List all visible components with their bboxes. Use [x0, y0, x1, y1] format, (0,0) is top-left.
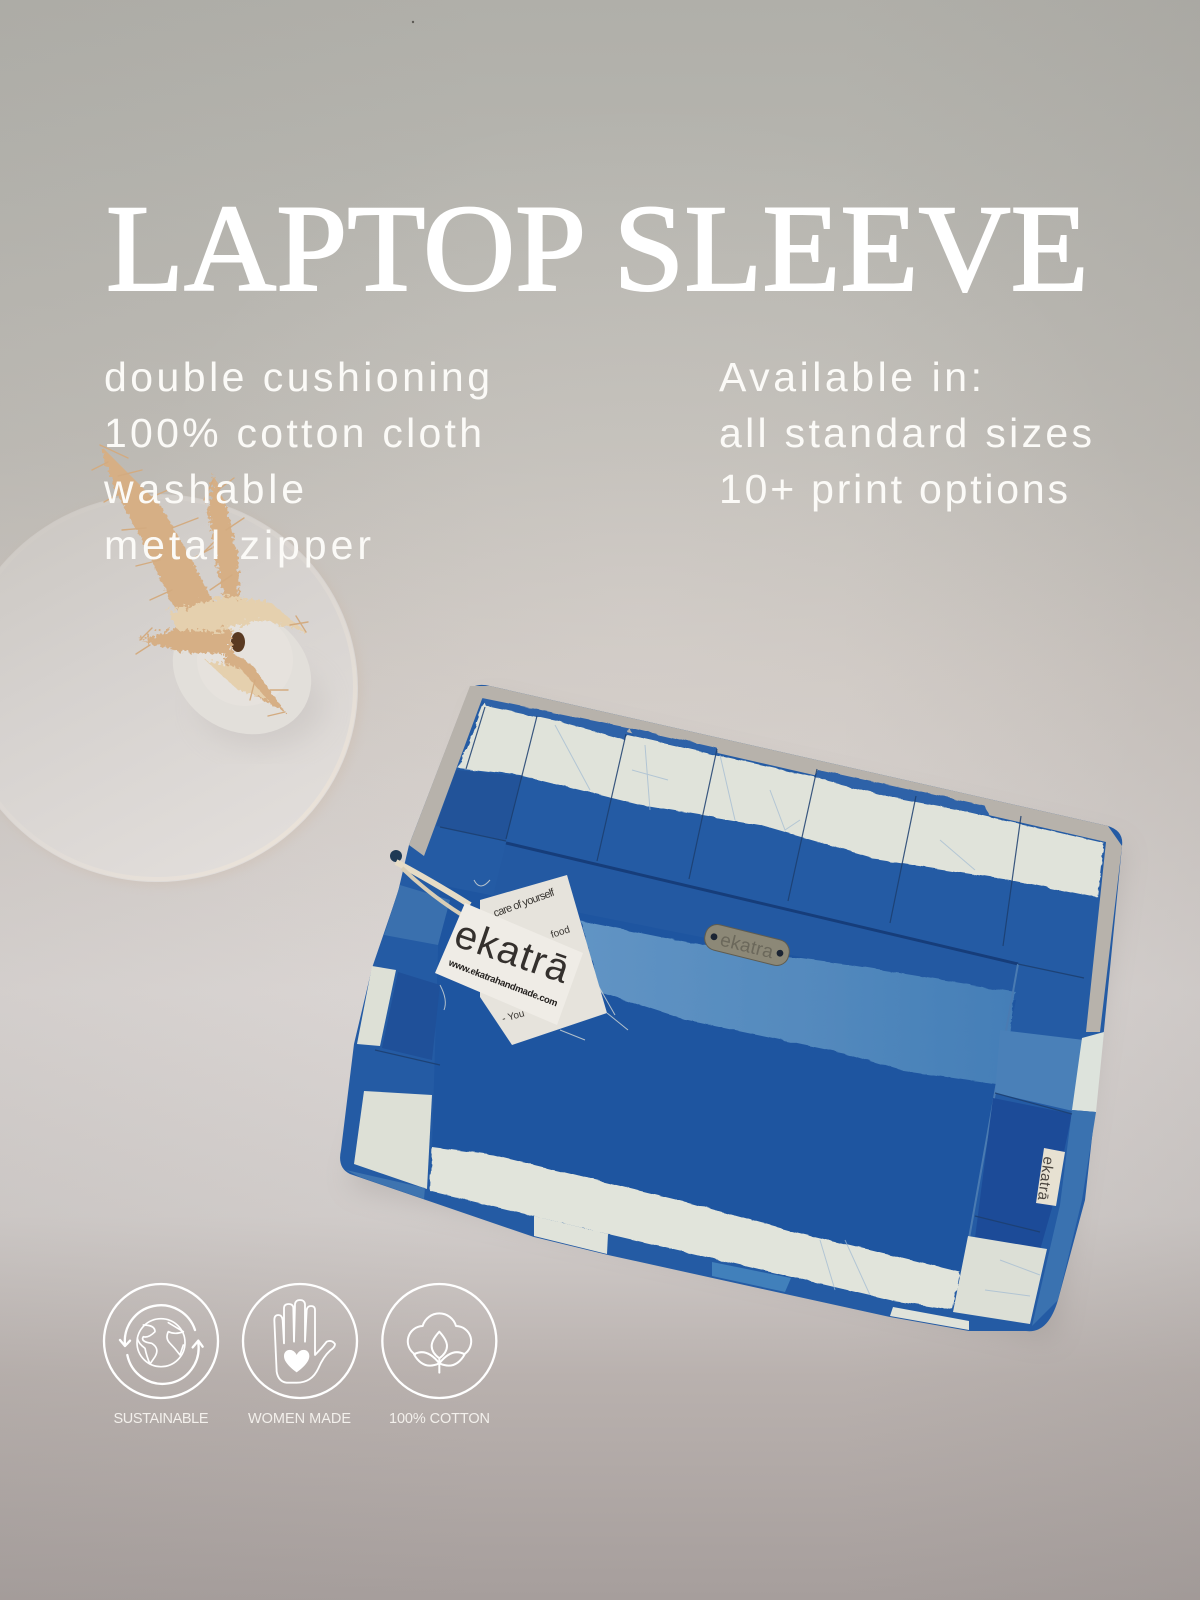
- availability list: 10+ print options: [719, 466, 1068, 512]
- plate with vase and dried grass: [0, 445, 362, 886]
- loose threads: [440, 880, 628, 1040]
- badge: women made: [243, 1284, 357, 1427]
- blue dye strip along the top edge: [482, 698, 990, 816]
- side label: ekatrā: [1034, 1155, 1057, 1202]
- quilting seams: [375, 707, 1084, 1232]
- left white patches: [354, 966, 432, 1189]
- features list: [103, 354, 490, 568]
- title: LAPTOP SLEEVE: [106, 181, 1089, 318]
- label: SUSTAINABLE: [114, 1411, 209, 1427]
- badge: 100% cotton: [382, 1284, 496, 1427]
- icon: cotton boll: [382, 1284, 496, 1398]
- bottom right white patch: [953, 1236, 1047, 1324]
- side label: [1034, 1148, 1065, 1206]
- pocket: [432, 843, 1018, 1272]
- metal logo plate: [702, 922, 792, 968]
- availability list: all standard sizes: [719, 410, 1092, 456]
- icon: earth with circular arrows: [104, 1284, 218, 1398]
- features list: 100% cotton cloth: [104, 410, 482, 456]
- top white stripe: [458, 702, 1104, 898]
- features list: washable: [103, 466, 304, 512]
- icon: hand with heart: [243, 1284, 357, 1398]
- dried grass: [92, 445, 308, 716]
- bottom white stripe: [430, 1147, 960, 1310]
- label: WOMEN MADE: [248, 1411, 351, 1427]
- features list: double cushioning: [104, 354, 490, 400]
- features list: metal zipper: [104, 522, 371, 568]
- front hang tag: www.ekatrahandmade.com: [446, 957, 559, 1009]
- back hang tag: [480, 875, 607, 1045]
- metal logo plate: ekatra: [718, 930, 776, 963]
- vase: [150, 583, 334, 759]
- zipper band: [409, 686, 1122, 1032]
- bottom white patches: [534, 1216, 969, 1330]
- pocket top stitched shadow: [506, 843, 1018, 964]
- plate: [0, 494, 362, 886]
- mid panel shading: [436, 770, 522, 840]
- right side blocks: [975, 1030, 1104, 1326]
- pocket light wash: [581, 921, 1016, 1085]
- front hang tag: [435, 903, 583, 1025]
- back hang tag: care of yourself: [492, 886, 557, 920]
- back hang tag: food: [550, 924, 571, 941]
- indigo cracks in white dye: [555, 725, 1040, 1296]
- availability list: Available in:: [719, 354, 982, 400]
- sleeve body: [340, 685, 1122, 1331]
- back hang tag: - You: [501, 1008, 526, 1025]
- zipper pull and cord: [390, 850, 470, 915]
- laptop sleeve: [340, 685, 1124, 1341]
- label: 100% COTTON: [389, 1411, 490, 1427]
- availability list: [719, 354, 1092, 512]
- left blue patches: [346, 885, 791, 1292]
- badge: sustainable: [104, 1284, 218, 1427]
- front hang tag: ekatrā: [449, 912, 576, 992]
- sleeve drop shadow: [349, 701, 1124, 1341]
